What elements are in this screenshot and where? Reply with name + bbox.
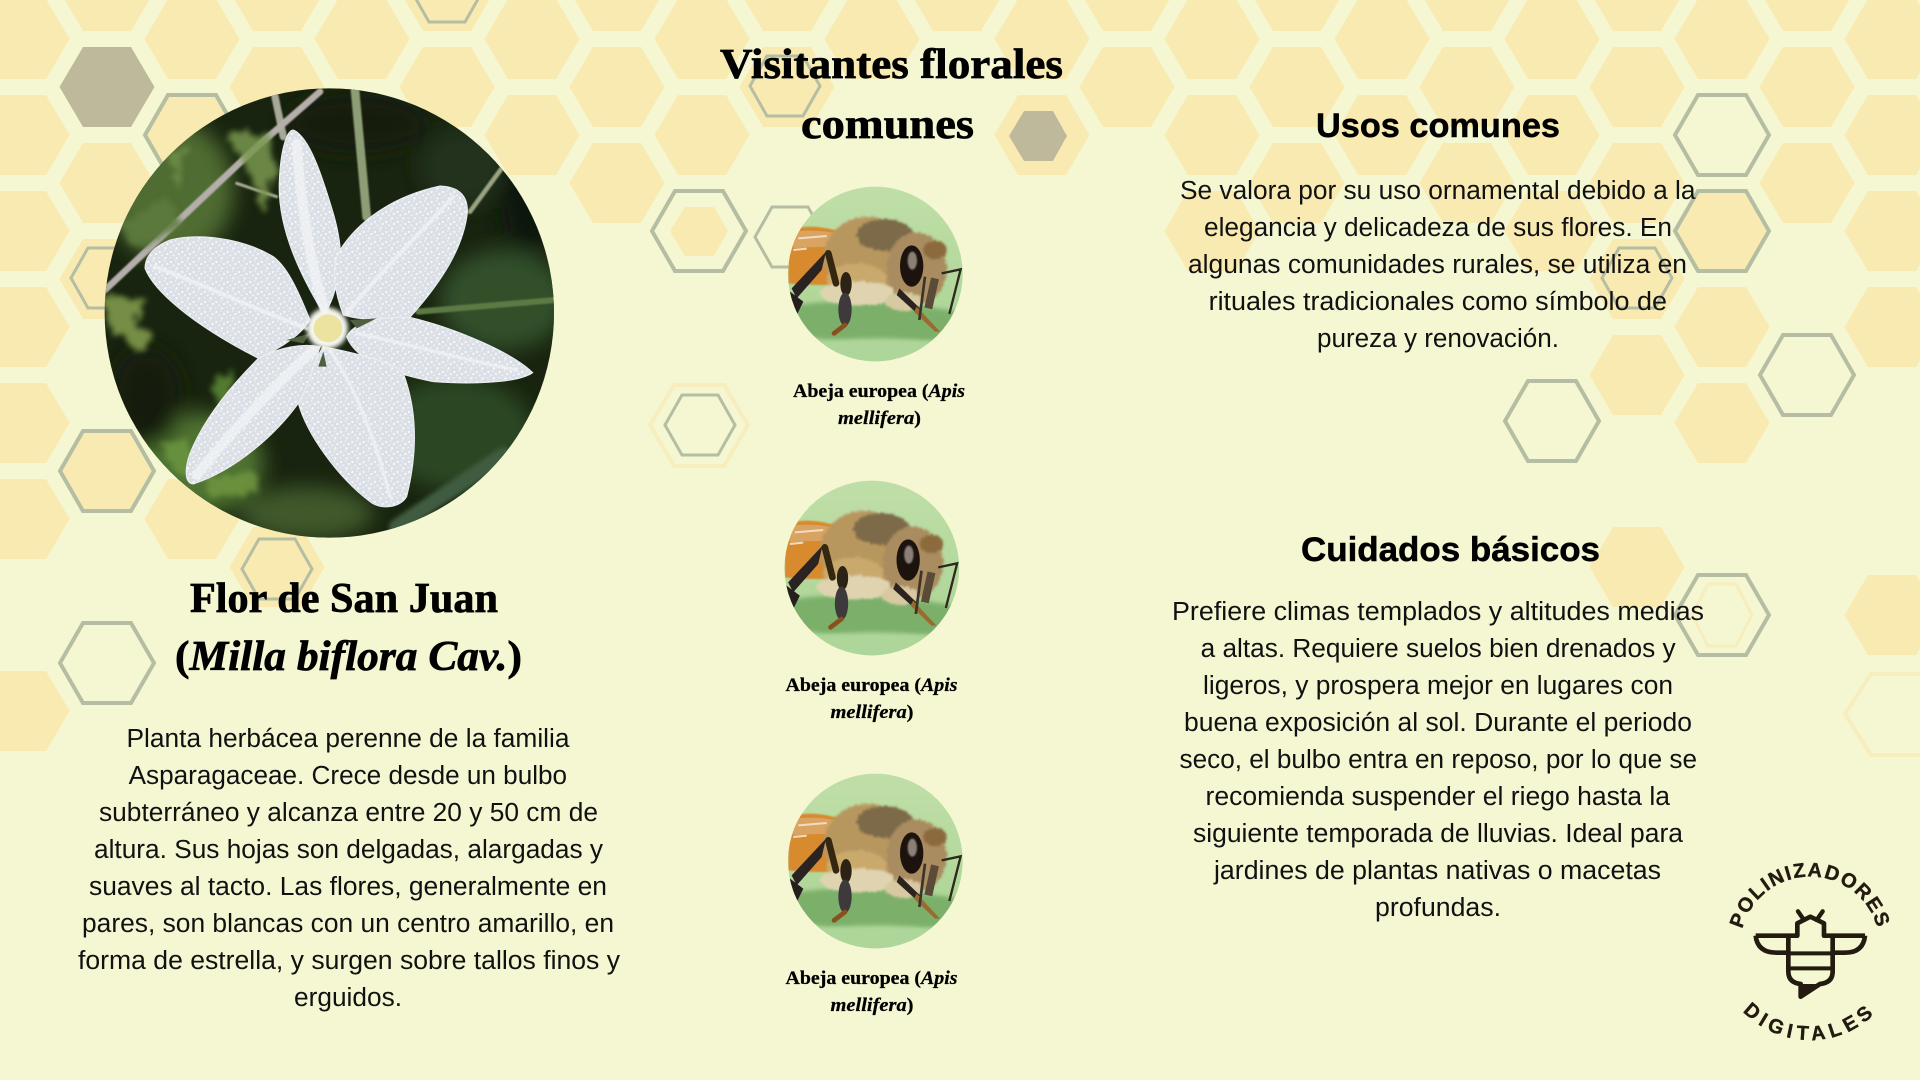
text: common uses: algunas comunidades rurales, se utiliza en xyxy=(1188,251,1687,279)
text: basic care: buena exposición al sol. Durante el periodo xyxy=(1184,709,1692,737)
caption: bee 2: Abeja europea ( Apis xyxy=(786,675,958,696)
caption: bee 1 xyxy=(793,381,965,429)
logo: Polinizadores Digitales xyxy=(1729,862,1890,1041)
text: common uses xyxy=(1180,177,1696,353)
caption: bee 2: mellifera ) xyxy=(830,702,914,723)
text: plant description: forma de estrella, y surgen sobre tallos finos y xyxy=(78,947,620,975)
logo: Polinizadores Digitales: DIGITALES xyxy=(1743,1002,1872,1041)
text: basic care: seco, el bulbo entra en reposo, por lo que se xyxy=(1180,746,1697,774)
icon: bee emblem xyxy=(1756,911,1865,999)
text: common uses: elegancia y delicadeza de sus flores. En xyxy=(1204,214,1672,242)
grey accent hexagons xyxy=(60,47,1067,161)
text: basic care: ligeros, y prospera mejor en lugares con xyxy=(1203,672,1673,700)
outlined hexagons xyxy=(60,0,1920,755)
heading: species name xyxy=(175,576,522,680)
text: plant description: suaves al tacto. Las flores, generalmente en xyxy=(89,873,607,901)
photo: bee 2 xyxy=(783,479,963,659)
text: plant description: altura. Sus hojas son delgadas, alargadas y xyxy=(94,836,603,864)
text: basic care: jardines de plantas nativas o macetas xyxy=(1213,857,1661,885)
text: common uses: Se valora por su uso ornamental debido a la xyxy=(1180,177,1696,205)
heading: basic care: Cuidados básicos xyxy=(1301,531,1600,569)
caption: bee 1: mellifera ) xyxy=(838,408,921,429)
caption: bee 3: Abeja europea ( Apis xyxy=(786,968,958,989)
text: common uses: rituales tradicionales como símbolo de xyxy=(1209,288,1667,316)
text: basic care: profundas. xyxy=(1375,894,1501,922)
title: common floral visitors: Visitantes florales xyxy=(720,42,1063,88)
petals xyxy=(145,130,533,507)
caption: bee 1: Abeja europea ( Apis xyxy=(793,381,965,402)
heading: common uses: Usos comunes xyxy=(1316,107,1560,145)
heading: species name: (Milla biflora Cav.) xyxy=(175,634,522,680)
text: basic care xyxy=(1172,598,1704,922)
background honeycomb xyxy=(0,0,1920,751)
text: plant description: subterráneo y alcanza entre 20 y 50 cm de xyxy=(99,799,598,827)
logo: Polinizadores Digitales: POLINIZADORES xyxy=(1729,862,1890,928)
photo: white flower xyxy=(100,83,567,543)
text: basic care: siguiente temporada de lluvias. Ideal para xyxy=(1193,820,1684,848)
photo: bee 1 xyxy=(787,185,967,365)
text: plant description: pares, son blancas con un centro amarillo, en xyxy=(82,910,614,938)
text: basic care: Prefiere climas templados y altitudes medias xyxy=(1172,598,1704,626)
caption: bee 3 xyxy=(786,968,958,1016)
text: basic care: a altas. Requiere suelos bien drenados y xyxy=(1201,635,1676,663)
photo: bee 3 xyxy=(787,772,967,952)
caption: bee 3: mellifera ) xyxy=(830,995,914,1016)
text: common uses: pureza y renovación. xyxy=(1317,325,1559,353)
text: plant description: Asparagaceae. Crece desde un bulbo xyxy=(129,762,567,790)
text: plant description: Planta herbácea perenne de la familia xyxy=(126,725,570,753)
heading: species name: Flor de San Juan xyxy=(190,576,498,622)
text: basic care: recomienda suspender el riego hasta la xyxy=(1206,783,1671,811)
title: common floral visitors xyxy=(720,42,1063,148)
caption: bee 2 xyxy=(786,675,958,723)
text: plant description: erguidos. xyxy=(294,984,402,1012)
title: common floral visitors: comunes xyxy=(801,102,974,148)
text: plant description xyxy=(78,725,620,1012)
